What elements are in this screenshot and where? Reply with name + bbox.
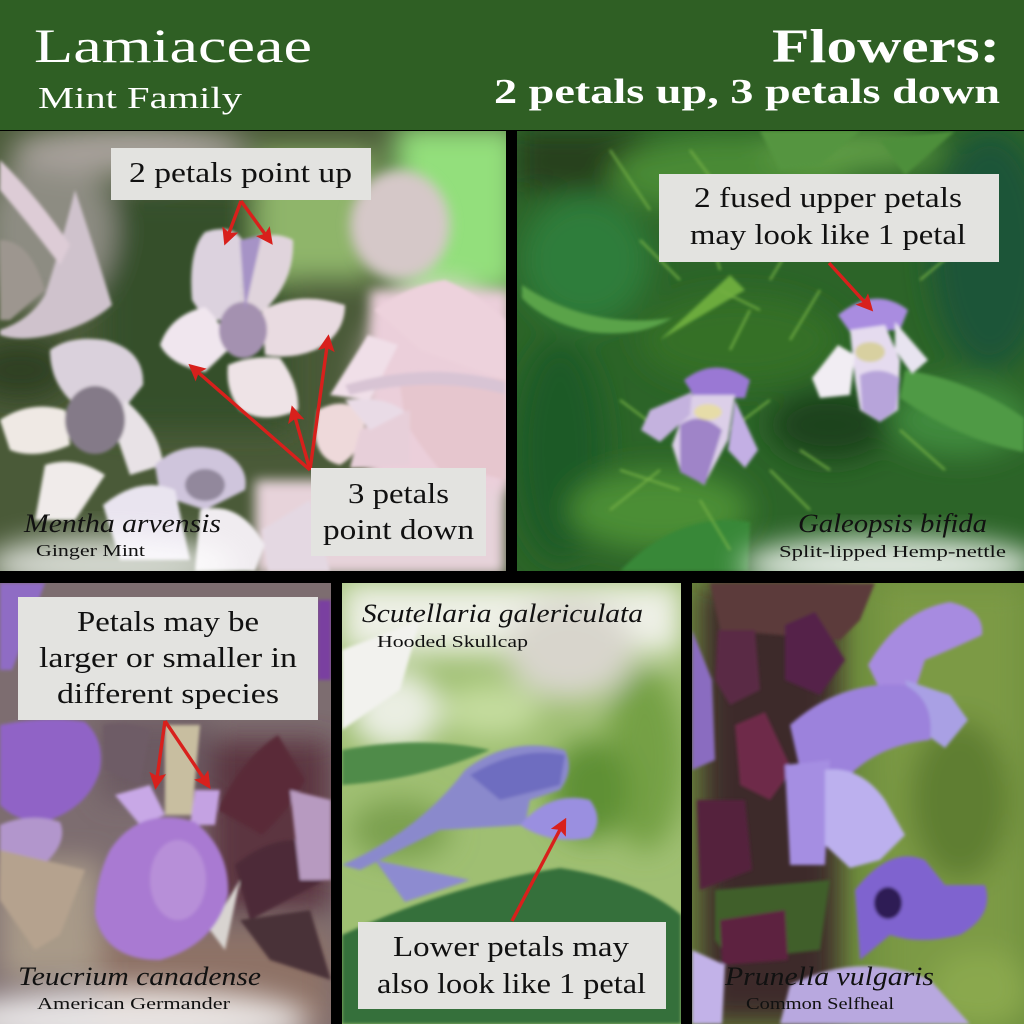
- flower: [115, 785, 165, 825]
- lower flower: [155, 447, 246, 510]
- arrow: lower petals: [512, 822, 564, 921]
- caption: Mentha arvensis: Mentha arvensis: [23, 509, 221, 538]
- photo: skullcap: [342, 583, 685, 1024]
- caption: Prunella vulgaris: Prunella vulgaris: [724, 962, 934, 991]
- photo: mint flowers: [0, 125, 520, 595]
- leaf upper: [342, 742, 490, 785]
- caption: Prunella vulgaris: Common Selfheal: [746, 994, 894, 1013]
- caption: Scutellaria galericulata: [362, 599, 643, 651]
- panel: Scutellaria galericulata: [342, 583, 685, 1024]
- subtitle: Mint Family: Mint Family: [38, 80, 243, 115]
- lower right flower: [855, 856, 987, 960]
- lower flower: [375, 860, 470, 902]
- panel: Galeopsis bifida: [515, 128, 1024, 593]
- callout: lower petals: Lower petals may: [393, 931, 630, 963]
- caption: Teucrium canadense: Teucrium canadense: [18, 962, 261, 991]
- callout: petal size: [18, 597, 318, 720]
- callout: 2 petals point up: [111, 148, 371, 200]
- callout: petal size: Petals may be: [77, 606, 259, 638]
- callout: fused upper petals: may look like 1 petal: [690, 219, 966, 251]
- spiky stems: [610, 150, 950, 550]
- panel: Mentha arvensis: [0, 125, 520, 595]
- title: Lamiaceae: Lamiaceae: [34, 20, 312, 73]
- photo: hemp-nettle: [515, 128, 1024, 593]
- right flower: [330, 335, 398, 400]
- caption: Galeopsis bifida: [779, 509, 1006, 561]
- callout: lower petals: [358, 922, 666, 1009]
- caption glow: [0, 535, 235, 595]
- heading: Flowers: Flowers:: [772, 20, 1000, 73]
- callout: petal size: larger or smaller in: [39, 642, 298, 674]
- caption: Scutellaria galericulata: Scutellaria galericulata: [362, 599, 643, 628]
- caption: Galeopsis bifida: Split-lipped Hemp-nettle: [779, 542, 1006, 561]
- callout: 3 petals point down: point down: [323, 514, 475, 546]
- header banner: [0, 0, 1024, 130]
- arrows: petals size: [156, 721, 208, 785]
- caption: Teucrium canadense: American Germander: [37, 994, 230, 1013]
- top flower: [868, 602, 982, 690]
- callout: petal size: different species: [57, 678, 279, 710]
- caption: Scutellaria galericulata: Hooded Skullcap: [377, 632, 528, 651]
- caption: Teucrium canadense: [20, 966, 260, 1009]
- central flower: [191, 229, 245, 320]
- heading: petal rule: 2 petals up, 3 petals down: [494, 72, 1000, 111]
- photo: germander: [0, 583, 331, 1024]
- callout: fused upper petals: [659, 174, 999, 262]
- callout: 3 petals point down: [311, 468, 486, 556]
- arrow: fused upper petals: [829, 263, 870, 308]
- caption: Galeopsis bifida: Galeopsis bifida: [798, 509, 987, 538]
- caption: Prunella vulgaris: [724, 962, 934, 1013]
- caption: Mentha arvensis: Ginger Mint: [36, 541, 145, 560]
- callout: lower petals: also look like 1 petal: [377, 968, 646, 1000]
- bottom flower: [692, 950, 725, 1024]
- callout: fused upper petals: 2 fused upper petals: [694, 182, 962, 214]
- main flower: [790, 684, 931, 775]
- right flower: [838, 299, 908, 332]
- panel: Teucrium canadense: [0, 583, 331, 1024]
- callout: 3 petals point down: 3 petals: [348, 478, 449, 510]
- left flower: [684, 368, 750, 398]
- arrows: two up, three down: [192, 201, 328, 470]
- panel: Prunella vulgaris: [692, 583, 1024, 1024]
- callout: 2 petals point up: 2 petals point up: [129, 157, 352, 189]
- photo: selfheal: [692, 583, 1024, 1024]
- caption: Mentha arvensis: [24, 514, 220, 560]
- left flower: [50, 339, 143, 420]
- leaf lower: [342, 868, 681, 1024]
- main flower: [342, 746, 569, 870]
